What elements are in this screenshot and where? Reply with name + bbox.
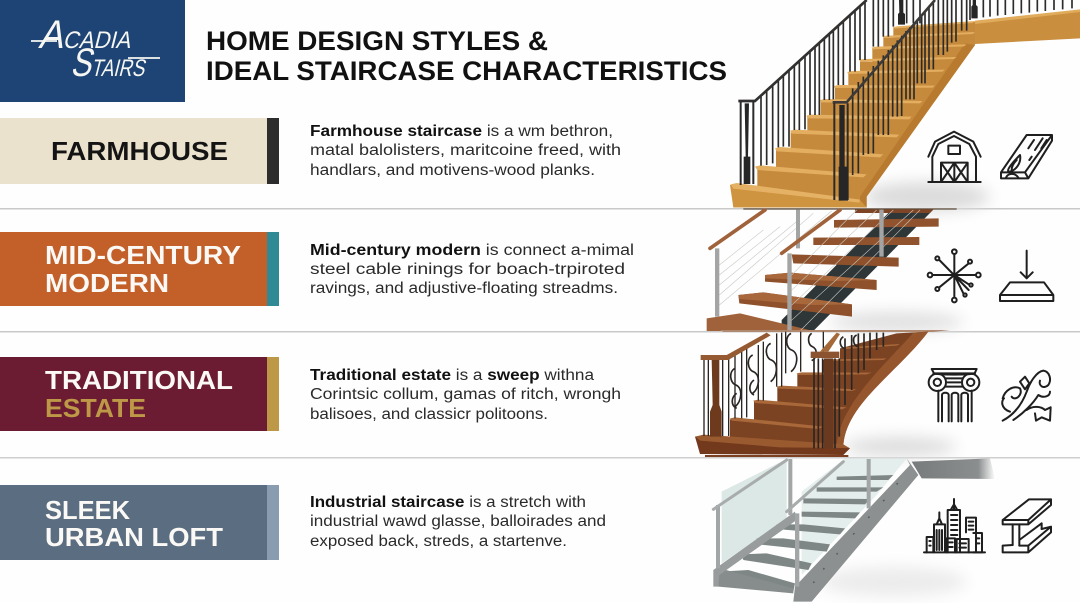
text: farmhouse description: Farmhouse staircase is a wm bethron, xyxy=(310,123,613,140)
staircase: farmhouse oak stairs with iron balusters xyxy=(730,0,1080,212)
panel: traditional estate label: ESTATE xyxy=(45,393,146,423)
text: mid-century description: Mid-century modern is connect a-mimal xyxy=(310,242,634,259)
panel: traditional estate label xyxy=(0,357,279,431)
panel: mid-century modern label: MODERN xyxy=(45,268,169,298)
text: industrial wawd glasse, balloirades and xyxy=(310,513,606,530)
text: ravings, and adjustive-floating streadms. xyxy=(310,280,618,297)
text: steel cable rinings for boach-trpiroted xyxy=(310,261,625,278)
panel: mid-century modern label xyxy=(0,232,279,306)
text: handlars, and motivens-wood planks. xyxy=(310,162,595,179)
icon: steel I-beam xyxy=(1003,499,1051,552)
text: urban loft description: Industrial staircase is a stretch with xyxy=(310,494,586,511)
icon: wood plank xyxy=(1001,135,1052,178)
panel: sleek urban loft label: SLEEK xyxy=(45,495,130,525)
icon: baroque ornament xyxy=(1002,371,1051,421)
staircase: mid-century floating treads with cable rail xyxy=(707,208,963,332)
panel: mid-century modern label: MID-CENTURY xyxy=(45,240,241,270)
logo: Acadia Stairs: STAIRS xyxy=(68,40,153,85)
text: traditional description: Traditional estate is a sweep withna xyxy=(310,367,594,384)
icon: classical column xyxy=(929,369,979,421)
text: balisoes, and classicr politoons. xyxy=(310,406,548,423)
text: Corintsic collum, gamas of ritch, wrongh xyxy=(310,386,621,403)
logo: Acadia Stairs: ACADIA xyxy=(36,12,140,57)
panel: traditional estate label: TRADITIONAL xyxy=(45,365,233,395)
icon: atomic starburst xyxy=(928,249,981,302)
icon: city skyline xyxy=(924,499,985,552)
title: HOME DESIGN STYLES & xyxy=(206,26,548,56)
text: exposed back, streds, a startenve. xyxy=(310,533,567,550)
logo: Acadia Stairs xyxy=(0,0,185,102)
staircase: urban loft steel and glass xyxy=(705,455,995,602)
icon: barn xyxy=(928,132,981,182)
icon: arrow pressing on floating tread xyxy=(1000,251,1053,301)
panel: farmhouse label: FARMHOUSE xyxy=(51,136,228,166)
staircase: traditional curved mahogany with wrought iron xyxy=(695,330,957,457)
title xyxy=(206,26,727,86)
panel: sleek urban loft label xyxy=(0,485,279,560)
text: matal balolisters, maritcoine freed, with xyxy=(310,142,621,159)
title: IDEAL STAIRCASE CHARACTERISTICS xyxy=(206,56,727,86)
panel: farmhouse label xyxy=(0,118,279,184)
panel: sleek urban loft label: URBAN LOFT xyxy=(45,522,223,552)
